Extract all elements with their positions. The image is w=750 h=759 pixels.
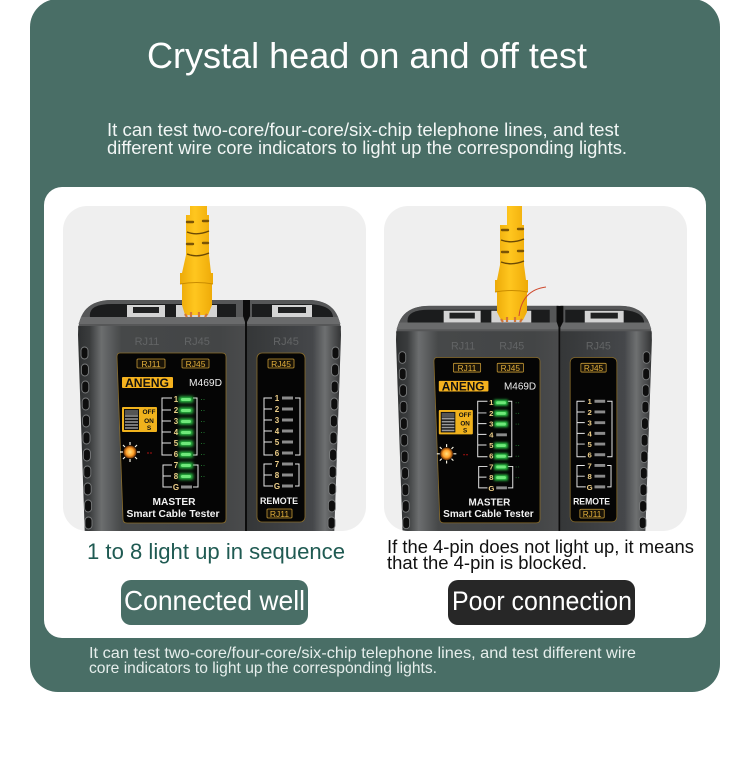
warning sun light [120, 442, 152, 462]
remote label panel: 7 [275, 460, 280, 469]
remote label panel: 1 [275, 394, 280, 403]
remote label panel: 7 [587, 461, 592, 470]
footer text [89, 645, 636, 677]
remote label panel: 2 [275, 405, 280, 414]
ANENG logo: ANENG [442, 381, 485, 394]
master label panel [117, 353, 226, 523]
power switch [439, 410, 473, 434]
master LED numbers: G [488, 484, 494, 493]
remote label panel [257, 353, 305, 522]
master label panel: RJ45 [501, 364, 520, 373]
embossed labels: RJ45 [499, 341, 524, 353]
warning sun light [437, 444, 468, 464]
footer text: core indicators to light up the corresponding lights. [89, 660, 437, 677]
embossed labels: RJ11 [451, 341, 475, 353]
master LED numbers: 3 [489, 420, 494, 429]
power switch: S [463, 427, 467, 434]
master label panel: RJ45 [186, 359, 206, 369]
ports [444, 311, 624, 322]
remote label panel: 4 [587, 429, 592, 438]
master LED numbers: 7 [174, 461, 179, 470]
left caption: 1 to 8 light up in sequence [87, 539, 345, 564]
ANENG logo: ANENG [125, 376, 169, 390]
panel: poor connection photo [384, 206, 687, 539]
master LED numbers: 6 [174, 450, 179, 459]
ports [127, 305, 312, 317]
remote label panel: 3 [275, 416, 280, 425]
master LED numbers: 5 [174, 439, 179, 448]
master unit body [78, 300, 245, 540]
remote label panel: REMOTE [573, 496, 610, 506]
remote label panel: 5 [587, 440, 592, 449]
embossed labels [452, 342, 610, 350]
remote unit body [560, 306, 652, 539]
power switch: ON [460, 421, 470, 428]
badge: poor connection [448, 580, 635, 625]
master wire brackets [478, 401, 513, 488]
remote label panel: 6 [275, 449, 280, 458]
master LEDs all lit [179, 396, 206, 488]
embossed labels: RJ45 [273, 336, 299, 348]
embossed labels: RJ11 [135, 336, 159, 348]
panel: connected well photo [63, 206, 366, 540]
remote unit body [247, 300, 341, 540]
embossed labels [136, 338, 298, 345]
master label panel [434, 357, 540, 523]
remote label panel: RJ11 [270, 509, 289, 519]
footer text: It can test two-core/four-core/six-chip telephone lines, and test different wire [89, 645, 636, 662]
side grip slots [399, 352, 650, 529]
master LED numbers: 1 [489, 398, 494, 407]
master LED numbers: 4 [489, 430, 494, 439]
master LED numbers: G [173, 483, 179, 492]
master LED numbers: 1 [174, 395, 179, 404]
remote label panel: 2 [587, 408, 592, 417]
intro text [107, 120, 627, 158]
remote label panel: RJ45 [271, 359, 291, 369]
remote label panel: 5 [275, 438, 280, 447]
intro text: It can test two-core/four-core/six-chip telephone lines, and test [107, 120, 619, 140]
master wire brackets [162, 398, 198, 487]
white content panel [44, 187, 706, 638]
master LED numbers: 6 [489, 452, 494, 461]
remote label panel: RJ11 [583, 510, 602, 519]
master LED numbers: 2 [489, 409, 494, 418]
title: Crystal head on and off test [147, 35, 587, 76]
master unit body [396, 306, 558, 539]
power switch: OFF [459, 412, 472, 419]
yellow network cable with loose red wire [495, 206, 546, 322]
power switch: OFF [142, 409, 156, 416]
right caption: If the 4-pin does not light up, it means [387, 537, 694, 557]
yellow network cable [180, 206, 213, 317]
intro text: different wire core indicators to light up the corresponding lights. [107, 138, 627, 158]
remote label panel: REMOTE [260, 496, 298, 506]
remote label panel: 6 [587, 451, 592, 460]
master label panel: MASTER [468, 497, 510, 508]
embossed labels: RJ45 [184, 336, 210, 348]
master label panel: Smart Cable Tester [443, 509, 534, 520]
master label panel: RJ11 [458, 364, 477, 373]
ANENG logo [122, 377, 173, 388]
master LED numbers: 2 [174, 406, 179, 415]
power switch: S [147, 425, 152, 432]
master LED numbers: 8 [174, 472, 179, 481]
remote label panel: 1 [587, 397, 592, 406]
power switch [122, 407, 157, 432]
embossed labels: RJ45 [586, 341, 611, 353]
master LED numbers: 5 [489, 441, 494, 450]
remote label panel: 8 [275, 471, 280, 480]
side grip slots [81, 347, 339, 529]
master label panel: RJ11 [141, 359, 161, 369]
right caption [387, 537, 694, 573]
remote label panel: 8 [587, 472, 592, 481]
master LEDs with pin 4 unlit [494, 400, 521, 489]
badge: connected well: Connected well [124, 585, 305, 616]
master LED numbers [173, 395, 179, 492]
remote label panel: 4 [275, 427, 280, 436]
master LED numbers: 8 [489, 473, 494, 482]
badge: connected well [121, 580, 308, 625]
badge: poor connection: Poor connection [452, 586, 632, 616]
master label panel: M469D [504, 382, 536, 393]
master LED numbers: 3 [174, 417, 179, 426]
remote label panel: RJ45 [584, 364, 604, 373]
power switch: ON [144, 418, 154, 425]
remote label panel [570, 357, 617, 522]
remote label panel: 3 [587, 419, 592, 428]
master label panel: Smart Cable Tester [126, 509, 220, 520]
right caption: that the 4-pin is blocked. [387, 553, 587, 573]
remote label panel: G [587, 483, 593, 492]
master LED numbers: 7 [489, 462, 494, 471]
master label panel: M469D [189, 378, 222, 389]
remote label panel: G [274, 482, 280, 491]
master LED numbers [488, 400, 494, 491]
master label panel: MASTER [152, 497, 196, 508]
master LED numbers: 4 [174, 428, 179, 437]
